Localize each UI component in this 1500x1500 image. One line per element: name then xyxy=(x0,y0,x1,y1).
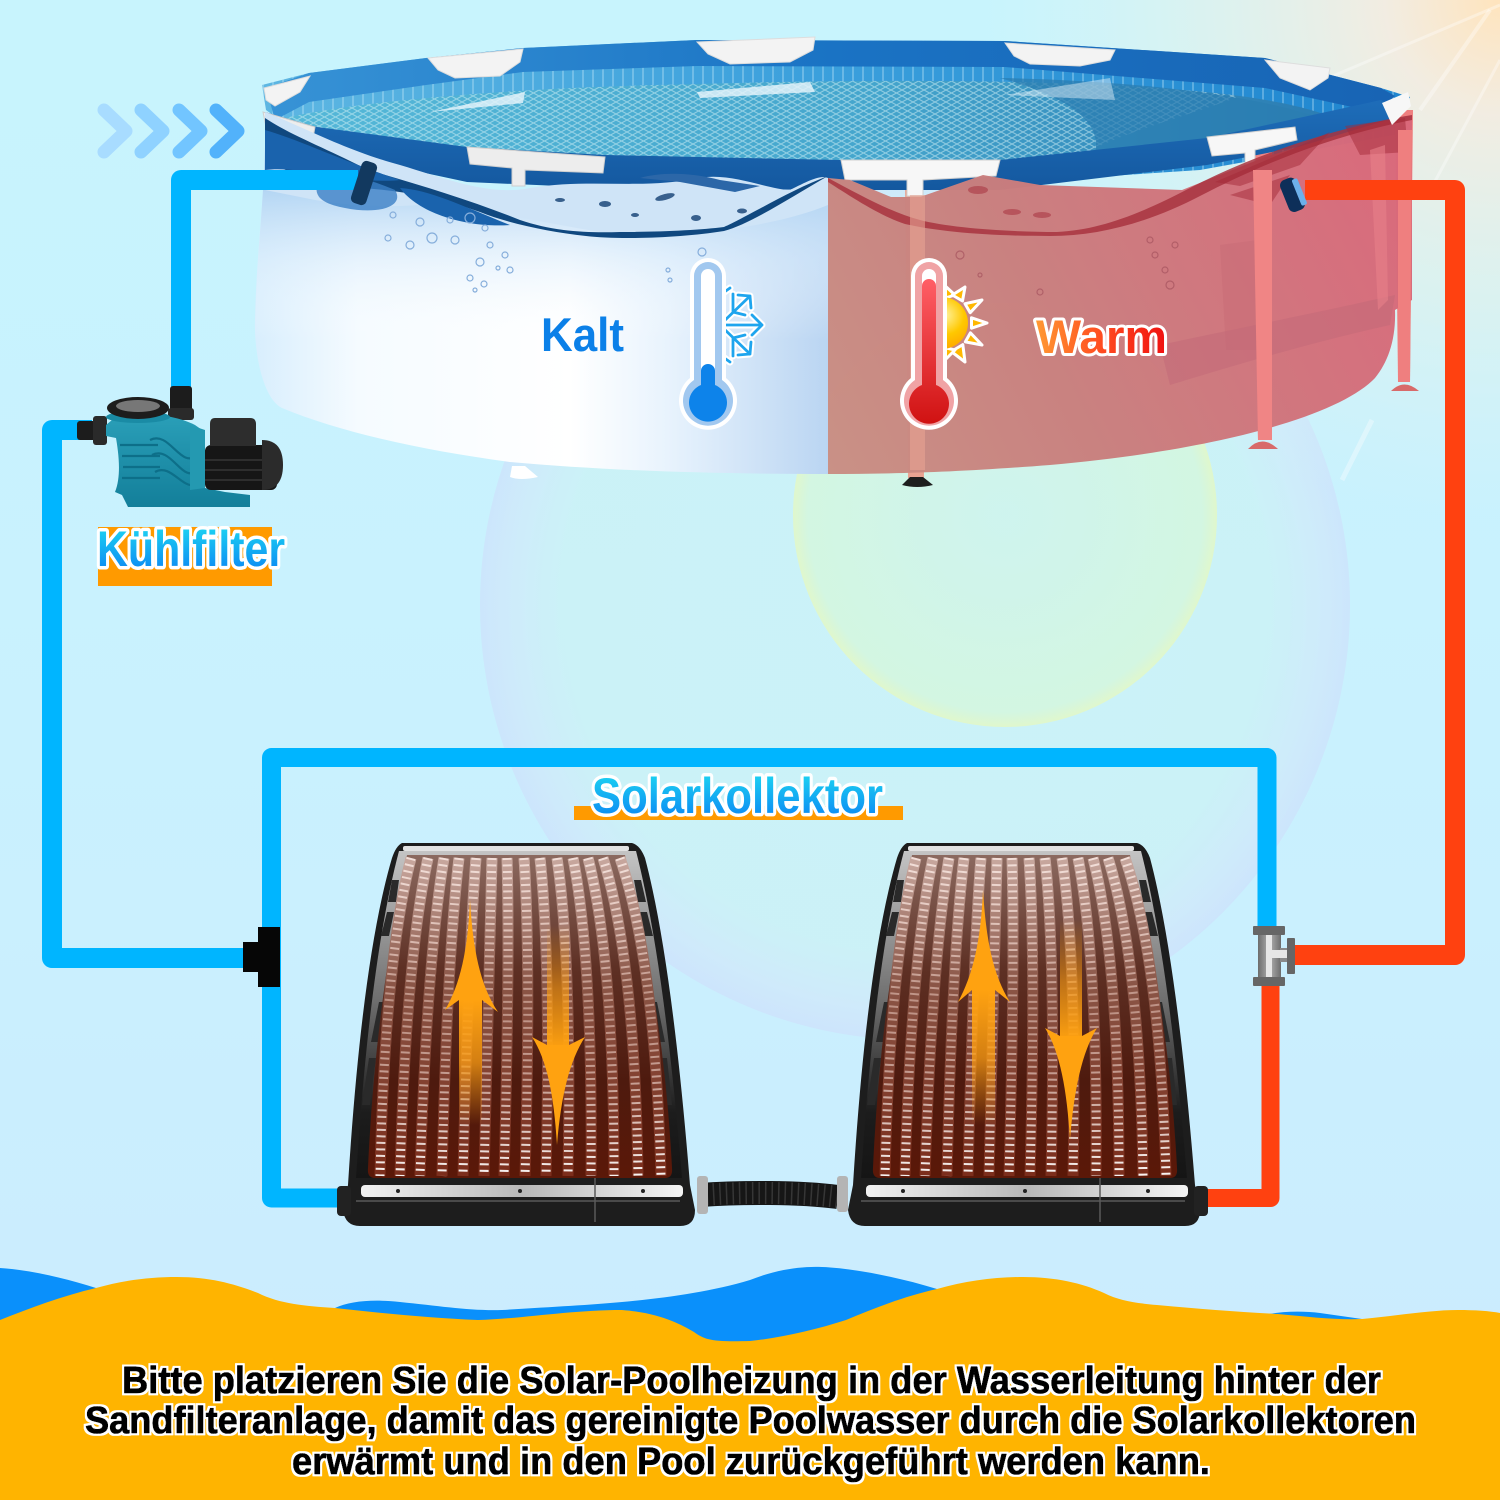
icon: warm thermometer with sun xyxy=(900,258,987,430)
arrow chevrons xyxy=(104,110,238,152)
metal tee fitting xyxy=(1253,926,1295,986)
front rim band xyxy=(265,100,1400,190)
filter pump xyxy=(77,386,283,507)
bottom waves xyxy=(0,1267,1500,1500)
mounting bar xyxy=(356,1178,683,1222)
bottom description text: erwärmt und in den Pool zurückgeführt werden kann. xyxy=(292,1441,1210,1483)
pump body xyxy=(106,415,250,507)
pump inlet xyxy=(77,416,107,445)
warm water pipe: solar outlet xyxy=(1205,985,1270,1198)
collector frame xyxy=(343,843,695,1226)
label: Kalt: Kalt xyxy=(541,308,624,361)
pump outlet xyxy=(168,386,194,420)
bottom description text: Bitte platzieren Sie die Solar-Poolheizung in der Wasserleitung hinter der xyxy=(122,1360,1381,1402)
outlet cap xyxy=(1194,1186,1208,1216)
panel: right solar collector xyxy=(848,843,1208,1226)
back rim band xyxy=(266,40,1395,120)
panel: left solar collector xyxy=(337,843,695,1226)
pool outlet fitting: warm xyxy=(1278,175,1309,214)
bottom description text xyxy=(85,1360,1416,1483)
water surface splash xyxy=(265,112,828,234)
pool legs xyxy=(510,110,1419,487)
pool xyxy=(255,37,1419,487)
warm water side of the pool xyxy=(828,115,1412,474)
bottom description text: Sandfilteranlage, damit das gereinigte Poolwasser durch die Solarkollektoren xyxy=(85,1400,1416,1442)
label: Kühlfilter: Kühlfilter xyxy=(97,521,285,577)
cold water pipe: pump to solar loop xyxy=(52,430,250,958)
warm water pipe: return to pool xyxy=(1293,190,1455,955)
solar loop feed pipe xyxy=(272,758,1267,1198)
inlet cap xyxy=(337,1186,351,1216)
pool interior xyxy=(262,40,1410,190)
strainer lid xyxy=(106,397,170,423)
down arrow xyxy=(1045,920,1097,1140)
snowflake xyxy=(720,285,762,367)
mounting bar xyxy=(861,1178,1188,1222)
up arrow xyxy=(445,900,498,1125)
label: Warm: Warm xyxy=(1036,310,1167,363)
collector frame xyxy=(848,843,1200,1226)
label: Solarkollektor: Solarkollektor xyxy=(592,768,883,824)
cold water side of the pool xyxy=(255,112,828,474)
back rim joints xyxy=(264,37,1330,106)
icon: cold thermometer with snowflake xyxy=(679,258,762,430)
sun xyxy=(916,283,987,363)
collector absorber xyxy=(873,855,1177,1178)
solar collector hose connector xyxy=(697,1176,848,1214)
motor xyxy=(205,418,283,490)
collector absorber xyxy=(368,855,672,1178)
black valve on cold line xyxy=(243,927,280,987)
cold water pipe: pool to pump xyxy=(181,180,358,395)
front rim joints xyxy=(263,112,1297,196)
down arrow xyxy=(532,925,585,1145)
corner joint xyxy=(1382,92,1411,125)
bubbles xyxy=(385,212,706,292)
up arrow xyxy=(958,890,1010,1125)
pool inlet fitting: cold xyxy=(350,160,378,206)
